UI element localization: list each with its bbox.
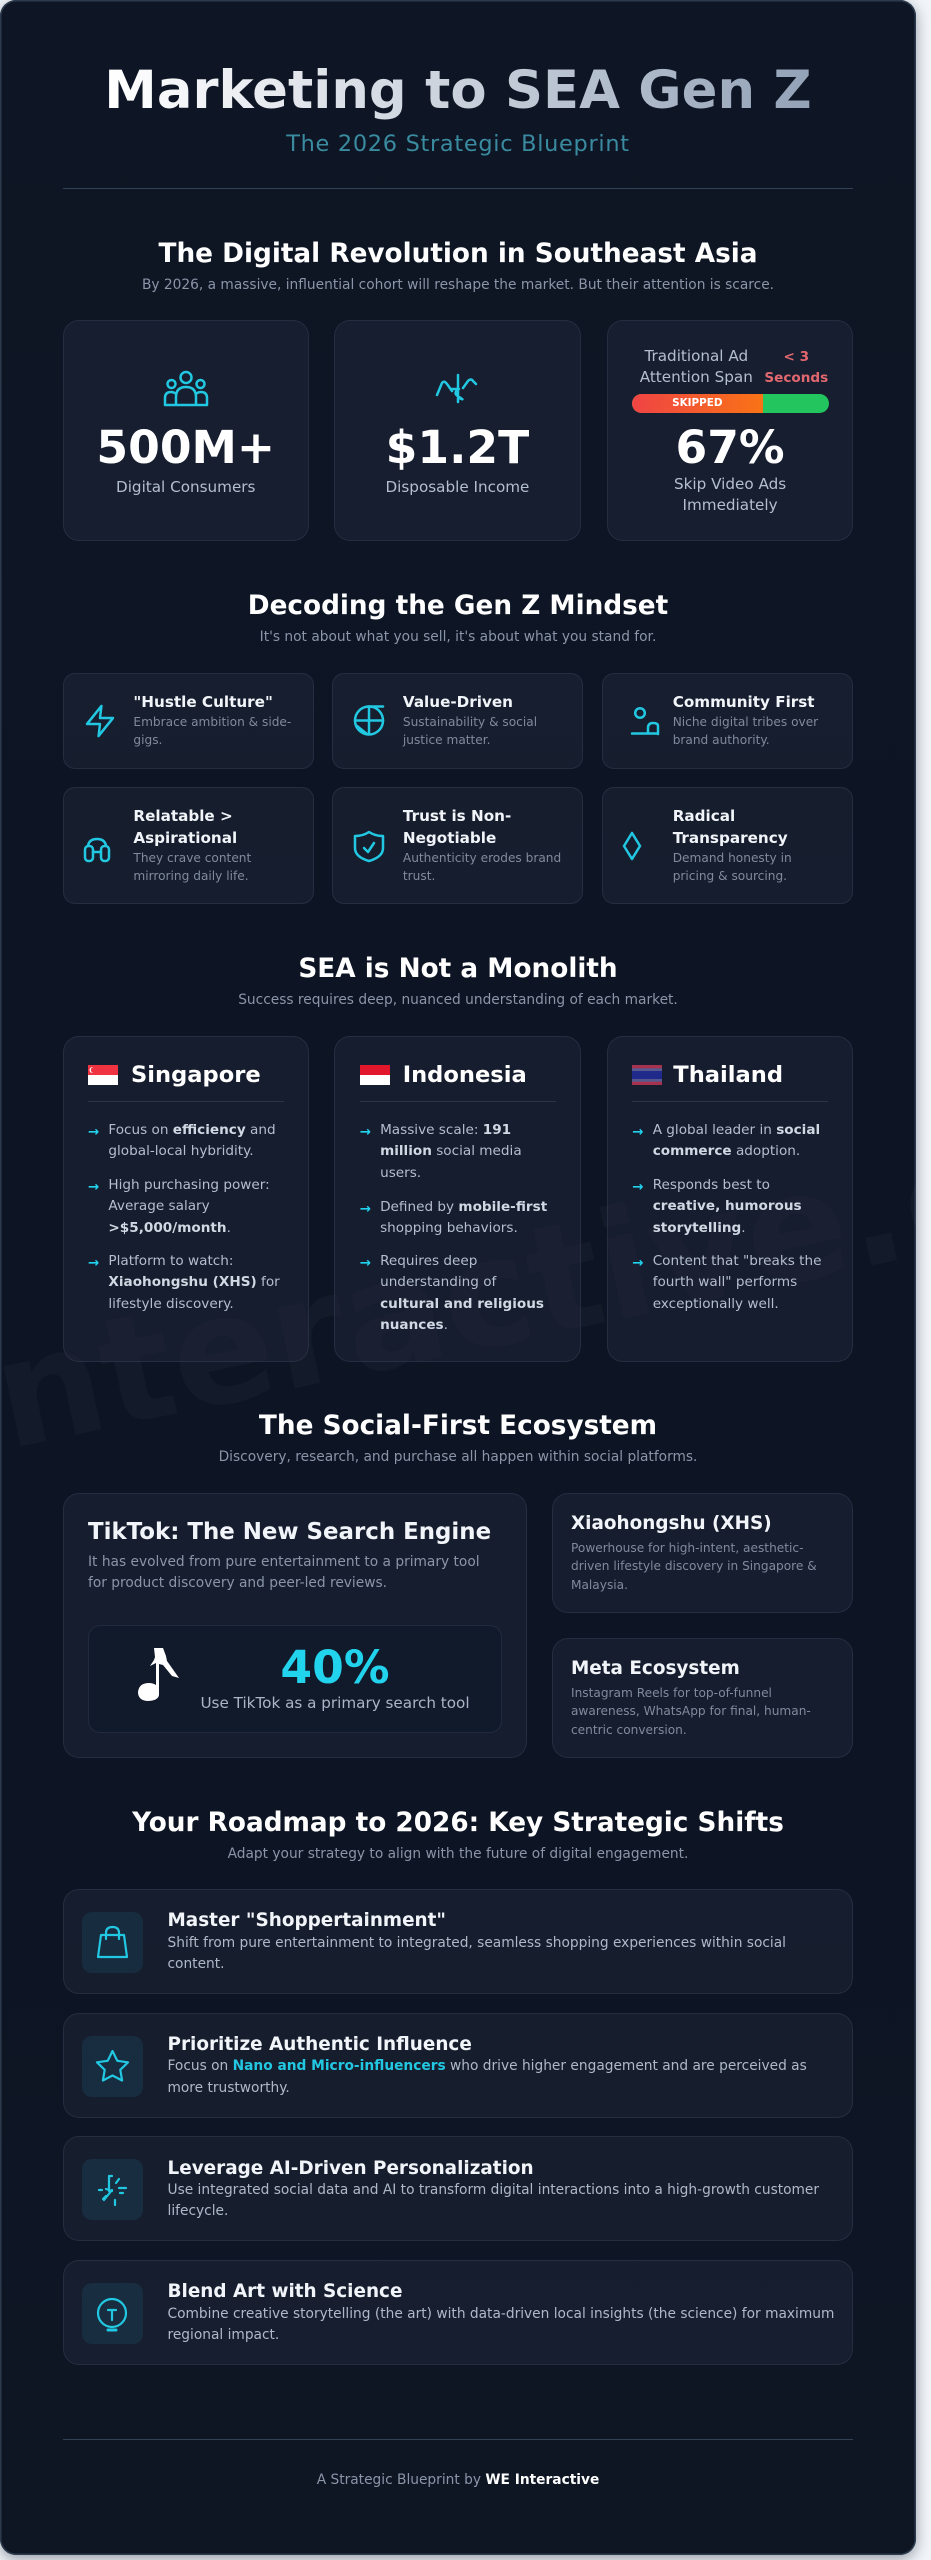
footer divider bbox=[63, 2438, 853, 2440]
text 3: Requires deep bbox=[380, 1253, 477, 1269]
panel: Meta bbox=[552, 1638, 853, 1758]
icon: sparkle bbox=[82, 2159, 143, 2220]
title bbox=[402, 807, 511, 847]
label: Disposable Income bbox=[385, 478, 529, 496]
title: Leverage AI-Driven Personalization bbox=[168, 2158, 534, 2179]
title: Marketing to SEA Gen Z bbox=[104, 60, 812, 121]
title: "Hustle Culture" bbox=[133, 693, 273, 711]
icon: music note bbox=[138, 1648, 179, 1701]
panel: shoppertainment bbox=[62, 1889, 853, 1994]
skipped progress bar bbox=[632, 394, 829, 413]
description bbox=[133, 714, 291, 747]
label: Skip Video Ads bbox=[674, 475, 786, 493]
attention span value: Seconds bbox=[764, 370, 828, 386]
description: centric conversion. bbox=[571, 1722, 687, 1736]
panel: hustle culture bbox=[62, 673, 314, 769]
flag: Indonesia bbox=[360, 1065, 390, 1085]
description bbox=[571, 1686, 811, 1736]
text 2 bbox=[108, 1177, 270, 1236]
description: lifecycle. bbox=[168, 2203, 228, 2219]
icon: headphones bbox=[84, 838, 110, 862]
text 1: Massive scale: 191 bbox=[380, 1122, 511, 1138]
country name: Singapore bbox=[131, 1062, 261, 1088]
text 3: cultural and religious bbox=[380, 1296, 544, 1312]
description: Focus on Nano and Micro-influencers who drive higher engagement and are perceived as bbox=[168, 2058, 807, 2074]
text 3: fourth wall" performs bbox=[653, 1274, 797, 1290]
icon: bulb bbox=[82, 2283, 143, 2344]
title: Trust is Non- bbox=[403, 807, 511, 825]
description bbox=[168, 2182, 820, 2219]
attention span value: < 3 bbox=[784, 349, 809, 365]
text 2: Responds best to bbox=[653, 1177, 770, 1193]
description: Combine creative storytelling (the art) with data-driven local insights (the science) for maximum bbox=[168, 2306, 834, 2322]
icon: diamond bbox=[622, 832, 642, 860]
description: brand authority. bbox=[673, 733, 770, 747]
text 1 bbox=[380, 1122, 522, 1181]
description: Niche digital tribes over bbox=[673, 714, 818, 728]
description: regional impact. bbox=[168, 2327, 279, 2343]
description: Use integrated social data and AI to transform digital interactions into a high-growth customer bbox=[168, 2182, 819, 2198]
icon: community bbox=[630, 707, 660, 736]
text 2: Average salary bbox=[108, 1198, 210, 1214]
attention span label: Attention Span bbox=[640, 368, 753, 386]
icon: star bbox=[82, 2036, 143, 2097]
text 2 bbox=[653, 1177, 802, 1236]
skipped segment bbox=[632, 394, 763, 413]
stat: 500M+: 500M+ bbox=[96, 420, 275, 474]
bullet 3: → bbox=[88, 1256, 99, 1271]
description: more trustworthy. bbox=[168, 2080, 290, 2096]
text 3: Platform to watch: bbox=[108, 1253, 233, 1269]
icon: shield bbox=[354, 830, 384, 862]
title: Relatable > bbox=[133, 807, 233, 825]
description: Instagram Reels for top-of-funnel bbox=[571, 1686, 772, 1700]
bullet 1: → bbox=[88, 1125, 99, 1140]
country name: Thailand bbox=[673, 1062, 783, 1088]
panel: attention span stat bbox=[607, 320, 853, 541]
bullet 3: → bbox=[632, 1256, 644, 1271]
title bbox=[672, 807, 788, 847]
text 2: High purchasing power: bbox=[108, 1177, 270, 1193]
subtitle: The 2026 Strategic Blueprint bbox=[286, 131, 630, 157]
description: Demand honesty in bbox=[673, 850, 792, 864]
label bbox=[674, 475, 786, 514]
description: justice matter. bbox=[403, 733, 491, 747]
callout: 40 percent bbox=[88, 1625, 502, 1733]
text 2: Defined by mobile-first bbox=[380, 1199, 547, 1215]
text 2 bbox=[380, 1199, 547, 1236]
description: Embrace ambition & side- bbox=[133, 714, 291, 728]
heading: digital revolution: The Digital Revolution in Southeast Asia bbox=[158, 238, 758, 268]
subheading: digital revolution: By 2026, a massive, influential cohort will reshape the market. But their attention is scarce. bbox=[142, 277, 774, 293]
title: Blend Art with Science bbox=[168, 2281, 402, 2302]
title: Xiaohongshu (XHS) bbox=[571, 1513, 772, 1534]
panel: Singapore bbox=[62, 1036, 309, 1362]
panel: digital consumers stat bbox=[62, 320, 309, 541]
description: awareness, WhatsApp for final, human- bbox=[571, 1704, 811, 1718]
text 3: understanding of bbox=[380, 1274, 496, 1290]
text 3 bbox=[653, 1253, 821, 1312]
icon: income bbox=[436, 374, 478, 404]
title: Radical bbox=[673, 807, 735, 825]
description: for product discovery and peer-led reviews. bbox=[88, 1575, 387, 1591]
panel: authentic influence bbox=[62, 2013, 853, 2118]
heading: monolith: SEA is Not a Monolith bbox=[298, 954, 618, 984]
icon: shopping bag bbox=[82, 1912, 143, 1973]
title: TikTok: The New Search Engine bbox=[88, 1519, 491, 1545]
panel: trust bbox=[332, 787, 583, 904]
footer text: A Strategic Blueprint by WE Interactive bbox=[317, 2472, 599, 2488]
description: Authenticity erodes brand bbox=[403, 850, 561, 864]
flag: Thailand bbox=[632, 1065, 662, 1085]
bullet 2: → bbox=[360, 1202, 371, 1217]
text 2: >$5,000/month. bbox=[108, 1220, 231, 1236]
title: Aspirational bbox=[133, 829, 237, 847]
country name: Indonesia bbox=[403, 1062, 527, 1088]
text 3: Content that "breaks the bbox=[653, 1253, 821, 1269]
text 1: Focus on efficiency and bbox=[108, 1122, 276, 1138]
description bbox=[168, 2058, 807, 2096]
title: Transparency bbox=[673, 829, 788, 847]
description bbox=[168, 1935, 786, 1972]
icon: globe bbox=[354, 705, 384, 736]
stat label: Use TikTok as a primary search tool bbox=[200, 1694, 470, 1712]
heading: mindset: Decoding the Gen Z Mindset bbox=[248, 590, 668, 620]
text 3: nuances. bbox=[380, 1317, 448, 1333]
stat: $1.2T: $1.2T bbox=[386, 420, 529, 474]
label: Digital Consumers bbox=[116, 478, 255, 496]
panel: disposable income stat bbox=[334, 320, 581, 541]
bullet 2: → bbox=[88, 1180, 99, 1195]
text 2: storytelling. bbox=[653, 1220, 746, 1236]
description: mirroring daily life. bbox=[133, 869, 249, 883]
text 1: commerce adoption. bbox=[653, 1143, 800, 1159]
text 3: exceptionally well. bbox=[653, 1296, 779, 1312]
subheading: mindset: It's not about what you sell, it's about what you stand for. bbox=[260, 629, 656, 645]
description: gigs. bbox=[133, 733, 162, 747]
description: Powerhouse for high-intent, aesthetic- bbox=[571, 1540, 803, 1554]
description: Malaysia. bbox=[571, 1578, 628, 1592]
panel: AI personalization bbox=[62, 2136, 853, 2241]
title bbox=[133, 807, 237, 847]
bullet 2: → bbox=[632, 1180, 644, 1195]
text 1 bbox=[108, 1122, 276, 1159]
description bbox=[673, 714, 818, 747]
bullet 1: → bbox=[632, 1125, 644, 1140]
panel: TikTok bbox=[62, 1493, 527, 1758]
title: Meta Ecosystem bbox=[571, 1658, 740, 1679]
attention span value bbox=[764, 349, 828, 386]
title: Community First bbox=[673, 693, 815, 711]
bullet 3: → bbox=[360, 1256, 371, 1271]
title: Value-Driven bbox=[403, 693, 513, 711]
description: trust. bbox=[403, 869, 435, 883]
stat: 67%: 67% bbox=[675, 420, 785, 474]
skipped segment: SKIPPED bbox=[672, 397, 722, 409]
panel: art with science bbox=[62, 2260, 853, 2365]
text 1: A global leader in social bbox=[653, 1122, 820, 1138]
description bbox=[133, 850, 251, 883]
title: Negotiable bbox=[403, 829, 496, 847]
label: Immediately bbox=[682, 496, 778, 514]
text 3: Xiaohongshu (XHS) for bbox=[108, 1274, 280, 1290]
description: Shift from pure entertainment to integrated, seamless shopping experiences within social bbox=[168, 1935, 786, 1951]
description bbox=[402, 714, 537, 747]
description bbox=[571, 1540, 817, 1592]
description bbox=[168, 2306, 834, 2343]
icon: bolt bbox=[86, 704, 114, 738]
attention span label bbox=[640, 347, 753, 386]
panel: Xiaohongshu bbox=[552, 1493, 853, 1613]
panel: value driven bbox=[332, 673, 583, 769]
icon: users bbox=[164, 370, 208, 406]
panel: radical transparency bbox=[602, 787, 853, 904]
subheading: ecosystem: Discovery, research, and purchase all happen within social platforms. bbox=[219, 1449, 697, 1465]
text 3 bbox=[108, 1253, 280, 1312]
heading: ecosystem: The Social-First Ecosystem bbox=[259, 1411, 657, 1441]
bullet 1: → bbox=[360, 1125, 371, 1140]
description bbox=[673, 850, 792, 883]
description bbox=[403, 850, 561, 883]
panel: relatable bbox=[62, 787, 314, 904]
title: Prioritize Authentic Influence bbox=[168, 2034, 472, 2055]
stat: 40%: 40% bbox=[280, 1640, 390, 1694]
text 1 bbox=[652, 1122, 820, 1159]
description bbox=[88, 1554, 480, 1591]
subheading: monolith: Success requires deep, nuanced understanding of each market. bbox=[238, 992, 678, 1008]
description: pricing & sourcing. bbox=[673, 869, 787, 883]
description: Sustainability & social bbox=[403, 714, 537, 728]
title: Master "Shoppertainment" bbox=[168, 1910, 446, 1931]
header divider bbox=[63, 188, 853, 189]
text 3: lifestyle discovery. bbox=[108, 1296, 234, 1312]
text 3 bbox=[380, 1253, 544, 1333]
text 1: global-local hybridity. bbox=[108, 1143, 254, 1159]
text 1: users. bbox=[380, 1165, 421, 1181]
panel: Thailand bbox=[607, 1036, 853, 1362]
description: They crave content bbox=[133, 850, 251, 864]
subheading: roadmap: Adapt your strategy to align with the future of digital engagement. bbox=[228, 1846, 688, 1862]
panel: Indonesia bbox=[334, 1036, 581, 1362]
description: driven lifestyle discovery in Singapore & bbox=[571, 1559, 817, 1573]
text 2: shopping behaviors. bbox=[380, 1220, 518, 1236]
description: It has evolved from pure entertainment to a primary tool bbox=[88, 1554, 480, 1570]
text 2: creative, humorous bbox=[653, 1198, 802, 1214]
description: content. bbox=[168, 1956, 225, 1972]
text 1: million social media bbox=[380, 1143, 522, 1159]
panel: community first bbox=[602, 673, 853, 769]
attention span label: Traditional Ad bbox=[644, 347, 748, 365]
flag: Singapore bbox=[88, 1065, 118, 1085]
heading: roadmap: Your Roadmap to 2026: Key Strategic Shifts bbox=[132, 1808, 784, 1838]
